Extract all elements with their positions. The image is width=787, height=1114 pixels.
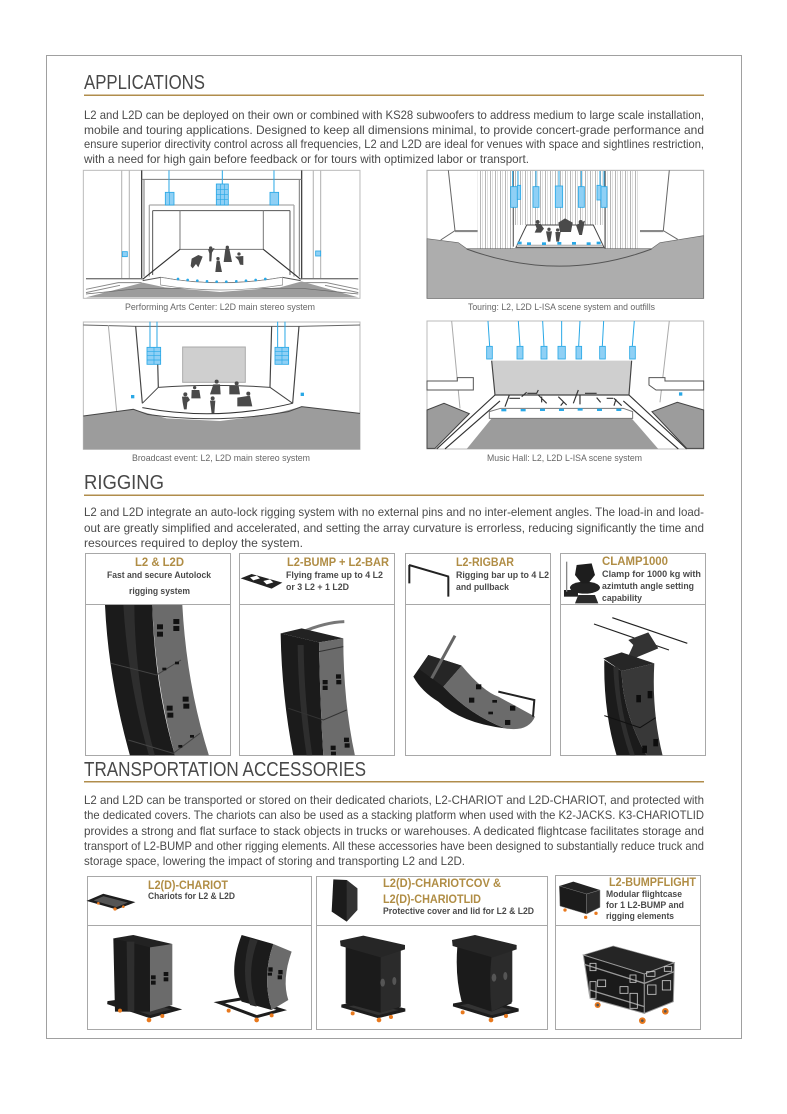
page border <box>46 56 742 1038</box>
panel: L2-RIGBAR <box>405 554 551 756</box>
text block: transportation intro: provides a strong and flat surface to stack objects in trucks or warehouses. A dedicated flightcase facilitates storage and <box>84 824 704 838</box>
card title: CLAMP1000 <box>602 556 668 568</box>
card text <box>456 570 549 593</box>
icon: flightcase <box>559 882 600 919</box>
text block: transportation intro: the dedicated covers. The chariots can also be used as a stacking platform when used with the K2-JACKS. K3-CHARIOTLID <box>84 808 704 822</box>
card text: Fast and secure Autolock <box>107 570 212 581</box>
text block: transportation intro: storage space, lowering the impact of storing and transporting L2 and L2D. <box>84 854 465 868</box>
card title <box>383 878 501 906</box>
icon: cover <box>332 879 357 922</box>
card text: Modular flightcase <box>606 889 682 900</box>
card text: azimtuth angle setting <box>602 581 694 592</box>
icon: arrays <box>511 171 607 245</box>
icon: performers <box>182 380 252 414</box>
icon: chariot <box>90 895 132 911</box>
text block: applications intro: L2 and L2D can be deployed on their own or combined with KS28 subwoofers to address medium to large scale installation, <box>84 108 704 122</box>
icon: rigbar <box>409 565 449 597</box>
caption: Touring: L2, L2D L-ISA scene system and outfills <box>468 302 655 313</box>
caption: Performing Arts Center: L2D main stereo system <box>125 302 315 313</box>
card text: Clamp for 1000 kg with <box>602 569 701 580</box>
card title: L2(D)-CHARIOTCOV & <box>383 878 501 890</box>
icon: arrays <box>487 321 682 411</box>
panel: broadcast event <box>83 322 360 464</box>
icon: front fills <box>177 278 267 283</box>
text block: applications intro: mobile and touring applications. Designed to keep all dimensions minimal, to provide concert-grade performance and <box>84 123 704 137</box>
image: flightcase <box>583 946 674 1024</box>
icon: musicians <box>505 390 622 407</box>
icon: clamp <box>564 562 600 603</box>
text block: applications intro: with a need for high gain before feedback or for tours with optimized labor or transport. <box>83 152 529 166</box>
card title: L2(D)-CHARIOTLID <box>383 894 481 906</box>
panel: L2-BUMP + L2-BAR <box>239 554 395 756</box>
card text <box>602 569 701 604</box>
card text: Flying frame up to 4 L2 <box>286 570 383 581</box>
card title: L2-BUMP + L2-BAR <box>287 557 390 569</box>
icon: performers <box>191 246 243 272</box>
text block: transportation intro <box>84 793 704 868</box>
card text: rigging elements <box>606 911 674 922</box>
icon: arrays <box>131 322 304 398</box>
image: array with clamp <box>594 618 687 756</box>
card text: Protective cover and lid for L2 & L2D <box>383 906 534 917</box>
icon: bump frame <box>241 574 282 589</box>
image: stacked chariots <box>108 935 292 1022</box>
card title: L2-RIGBAR <box>456 557 515 569</box>
text block: transportation intro: transport of L2-BUMP and other rigging elements. All these accessories have been designed to substantially reduce truck and <box>84 839 704 853</box>
card text: Chariots for L2 & L2D <box>148 891 235 902</box>
panel: L2(D)-CHARIOTCOV and LID <box>316 876 548 1030</box>
heading: applications: APPLICATIONS <box>84 72 205 94</box>
card text: or 3 L2 + 1 L2D <box>286 582 349 593</box>
panel: music hall <box>427 321 704 464</box>
panel: L2 and L2D <box>85 554 231 756</box>
image: angled array <box>413 636 535 729</box>
card text <box>107 570 212 597</box>
text block: rigging intro: L2 and L2D integrate an auto-lock rigging system with no external pins and no inter-element angles. The load-in and load- <box>84 505 704 519</box>
text block: rigging intro: out are greatly simplified and accelerated, and setting the array curvature is errorless, reducing significantly the time and <box>84 521 704 535</box>
text block: rigging intro: resources required to deploy the system. <box>84 536 303 550</box>
card title: L2 & L2D <box>135 557 184 569</box>
card text: capability <box>602 593 643 604</box>
card text: and pullback <box>456 582 510 593</box>
text block: rigging intro <box>84 505 704 550</box>
panel: L2(D)-CHARIOT <box>87 876 312 1030</box>
caption: Music Hall: L2, L2D L-ISA scene system <box>487 453 642 464</box>
panel: CLAMP1000 <box>560 554 706 756</box>
text block: applications intro: ensure superior directivity control across all frequencies, L2 and L2D are ideal for venues with space and sightlines restriction, <box>84 137 704 151</box>
panel: performing arts center <box>83 170 360 313</box>
image: covered chariots <box>340 935 518 1022</box>
text block: transportation intro: L2 and L2D can be transported or stored on their dedicated chariots, L2-CHARIOT and L2D-CHARIOT, and protected with <box>84 793 704 807</box>
card text <box>606 889 684 922</box>
heading: transportation accessories: TRANSPORTATION ACCESSORIES <box>84 759 366 781</box>
card text: rigging system <box>129 586 190 597</box>
card title: L2-BUMPFLIGHT <box>609 877 696 889</box>
image: array with bump <box>281 622 355 756</box>
caption: Broadcast event: L2, L2D main stereo system <box>132 453 310 464</box>
panel: touring <box>427 170 704 313</box>
heading: rigging: RIGGING <box>84 472 164 494</box>
card text: Rigging bar up to 4 L2 <box>456 570 549 581</box>
text block: applications intro <box>83 108 704 166</box>
card text: for 1 L2-BUMP and <box>606 900 684 911</box>
panel: L2-BUMPFLIGHT <box>555 876 701 1030</box>
card text <box>286 570 383 593</box>
icon: overhead arrays <box>122 170 321 257</box>
image: line array <box>105 605 209 756</box>
card title: L2(D)-CHARIOT <box>148 880 228 892</box>
icon: band <box>535 218 585 242</box>
